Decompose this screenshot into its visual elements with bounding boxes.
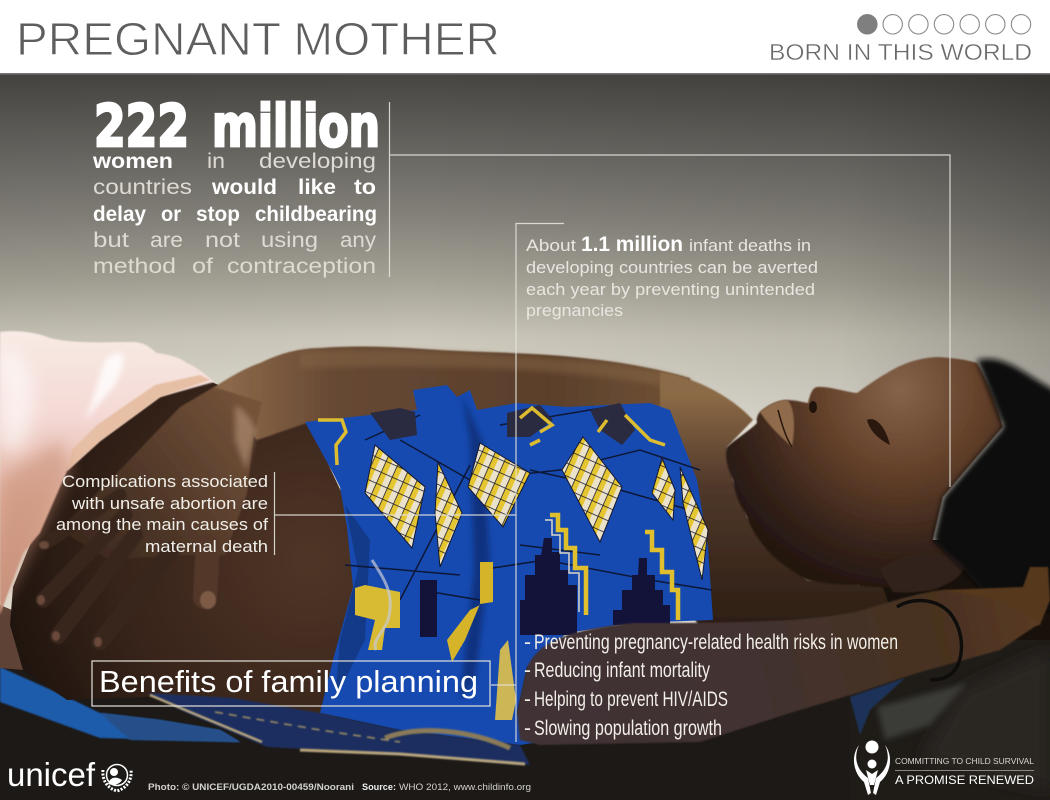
callout: 222 million: in <box>207 149 225 173</box>
callout: 222 million: delay <box>93 202 146 226</box>
callout: unsafe abortion: among the main causes of <box>56 516 268 534</box>
callout: 222 million: would <box>211 175 277 199</box>
callout: unsafe abortion <box>56 473 268 556</box>
finger tips <box>37 541 216 647</box>
callout: infant deaths: About <box>526 237 576 255</box>
ear <box>880 554 965 593</box>
callout: 222 million: countries <box>93 175 192 199</box>
callout: 222 million: to <box>354 175 376 199</box>
raised arm <box>517 590 1040 745</box>
callout: 222 million: not <box>205 228 240 252</box>
fabric stripes <box>345 405 712 600</box>
benefits list: - <box>524 631 531 654</box>
photo and source credits: WHO 2012, www.childinfo.org <box>399 782 531 793</box>
callout: 222 million: but <box>93 228 129 252</box>
blue sheet <box>0 667 240 742</box>
dark floor <box>0 660 1050 800</box>
nostril <box>809 401 817 413</box>
callout: 222 million: women <box>92 149 173 173</box>
callout: 222 million: 222 <box>94 92 189 160</box>
subheading: born in this world: BORN IN THIS WORLD <box>769 39 1032 65</box>
callout: infant deaths: developing countries can be averted <box>526 259 818 277</box>
benefits list: Preventing pregnancy-related health risks in women <box>534 631 898 654</box>
photo and source credits: Source: <box>362 782 396 793</box>
hair <box>933 359 1050 610</box>
lips <box>760 400 794 447</box>
dress fabric <box>305 385 713 745</box>
callout: unsafe abortion: with unsafe abortion are <box>71 495 268 513</box>
connector lines <box>274 102 950 742</box>
pink highlights <box>85 353 124 420</box>
benefits list: - <box>524 659 531 682</box>
callout: infant deaths: each year by preventing unintended <box>526 281 815 299</box>
logo: a promise renewed <box>854 740 1034 795</box>
pink garment <box>0 331 214 615</box>
bracelet <box>897 601 961 680</box>
photo and source credits: Photo: © UNICEF/UGDA2010-00459/Noorani <box>148 782 354 793</box>
header bar <box>0 0 1050 74</box>
callout: 222 million: developing <box>259 149 376 173</box>
callout: infant deaths <box>526 233 818 320</box>
pink ribbed band <box>67 375 210 471</box>
hem cream edges <box>150 695 525 764</box>
fabric corn motifs <box>365 445 425 548</box>
callout: 222 million: or <box>161 202 182 226</box>
face <box>726 357 1003 592</box>
upper arm <box>213 347 700 440</box>
left body strip <box>0 605 23 670</box>
fabric folds <box>460 395 490 700</box>
heading: benefits of family planning: Benefits of family planning <box>99 664 478 699</box>
callout: 222 million: using <box>261 228 318 252</box>
belly <box>10 380 355 720</box>
fabric lower left motifs <box>420 580 437 637</box>
pink lower shadow <box>0 440 70 610</box>
callout: 222 million: method <box>93 254 176 278</box>
benefits list: Slowing population growth <box>534 717 722 740</box>
benefits list: Reducing infant mortality <box>534 659 710 682</box>
photo and source credits <box>148 782 531 793</box>
callout: 222 million <box>92 92 380 278</box>
fabric hem <box>147 693 530 765</box>
shoulder and chest <box>660 372 900 650</box>
callout: 222 million: contraception <box>227 254 376 278</box>
heading: pregnant mother: PREGNANT MOTHER <box>16 13 500 65</box>
icon: unicef emblem <box>103 764 131 791</box>
callout: unsafe abortion: maternal death <box>145 538 268 556</box>
callout: 222 million: million <box>212 92 380 160</box>
fabric dark motifs <box>370 403 635 445</box>
callout: unsafe abortion: Complications associated <box>62 473 268 491</box>
blue sheet behind arm <box>850 678 905 735</box>
wrist highlight <box>235 405 256 470</box>
fabric stepped pyramids <box>520 538 577 635</box>
callout: 222 million: childbearing <box>255 202 377 226</box>
benefits list <box>524 631 898 740</box>
callout: 222 million: like <box>298 175 336 199</box>
callout: 222 million: are <box>150 228 183 252</box>
hand on belly <box>60 387 262 560</box>
callout: infant deaths: infant deaths in <box>689 237 811 255</box>
logo: a promise renewed: A PROMISE RENEWED <box>895 775 1034 787</box>
right dark pillow <box>850 620 1050 800</box>
icon: mother and child figure <box>854 740 890 795</box>
logo: a promise renewed: COMMITTING TO CHILD SURVIVAL <box>895 756 1034 766</box>
callout: 222 million: of <box>192 254 213 278</box>
fingers <box>43 495 208 642</box>
benefits list: - <box>524 717 531 740</box>
progress dots <box>858 15 1031 34</box>
callout: 222 million: stop <box>196 202 240 226</box>
hand behind head <box>943 567 1050 640</box>
benefits list: Helping to prevent HIV/AIDS <box>534 688 728 711</box>
callout: infant deaths: 1.1 million <box>581 233 683 256</box>
neck shadow underlay <box>860 540 1050 640</box>
benefits list: - <box>524 688 531 711</box>
logo: unicef: unicef <box>7 756 96 793</box>
eye <box>867 419 890 445</box>
fabric yellow zigzags <box>318 408 665 465</box>
callout: infant deaths: pregnancies <box>526 302 623 320</box>
callout: 222 million: any <box>340 228 376 252</box>
pillow highlight <box>877 683 967 740</box>
arm top light <box>300 350 690 392</box>
